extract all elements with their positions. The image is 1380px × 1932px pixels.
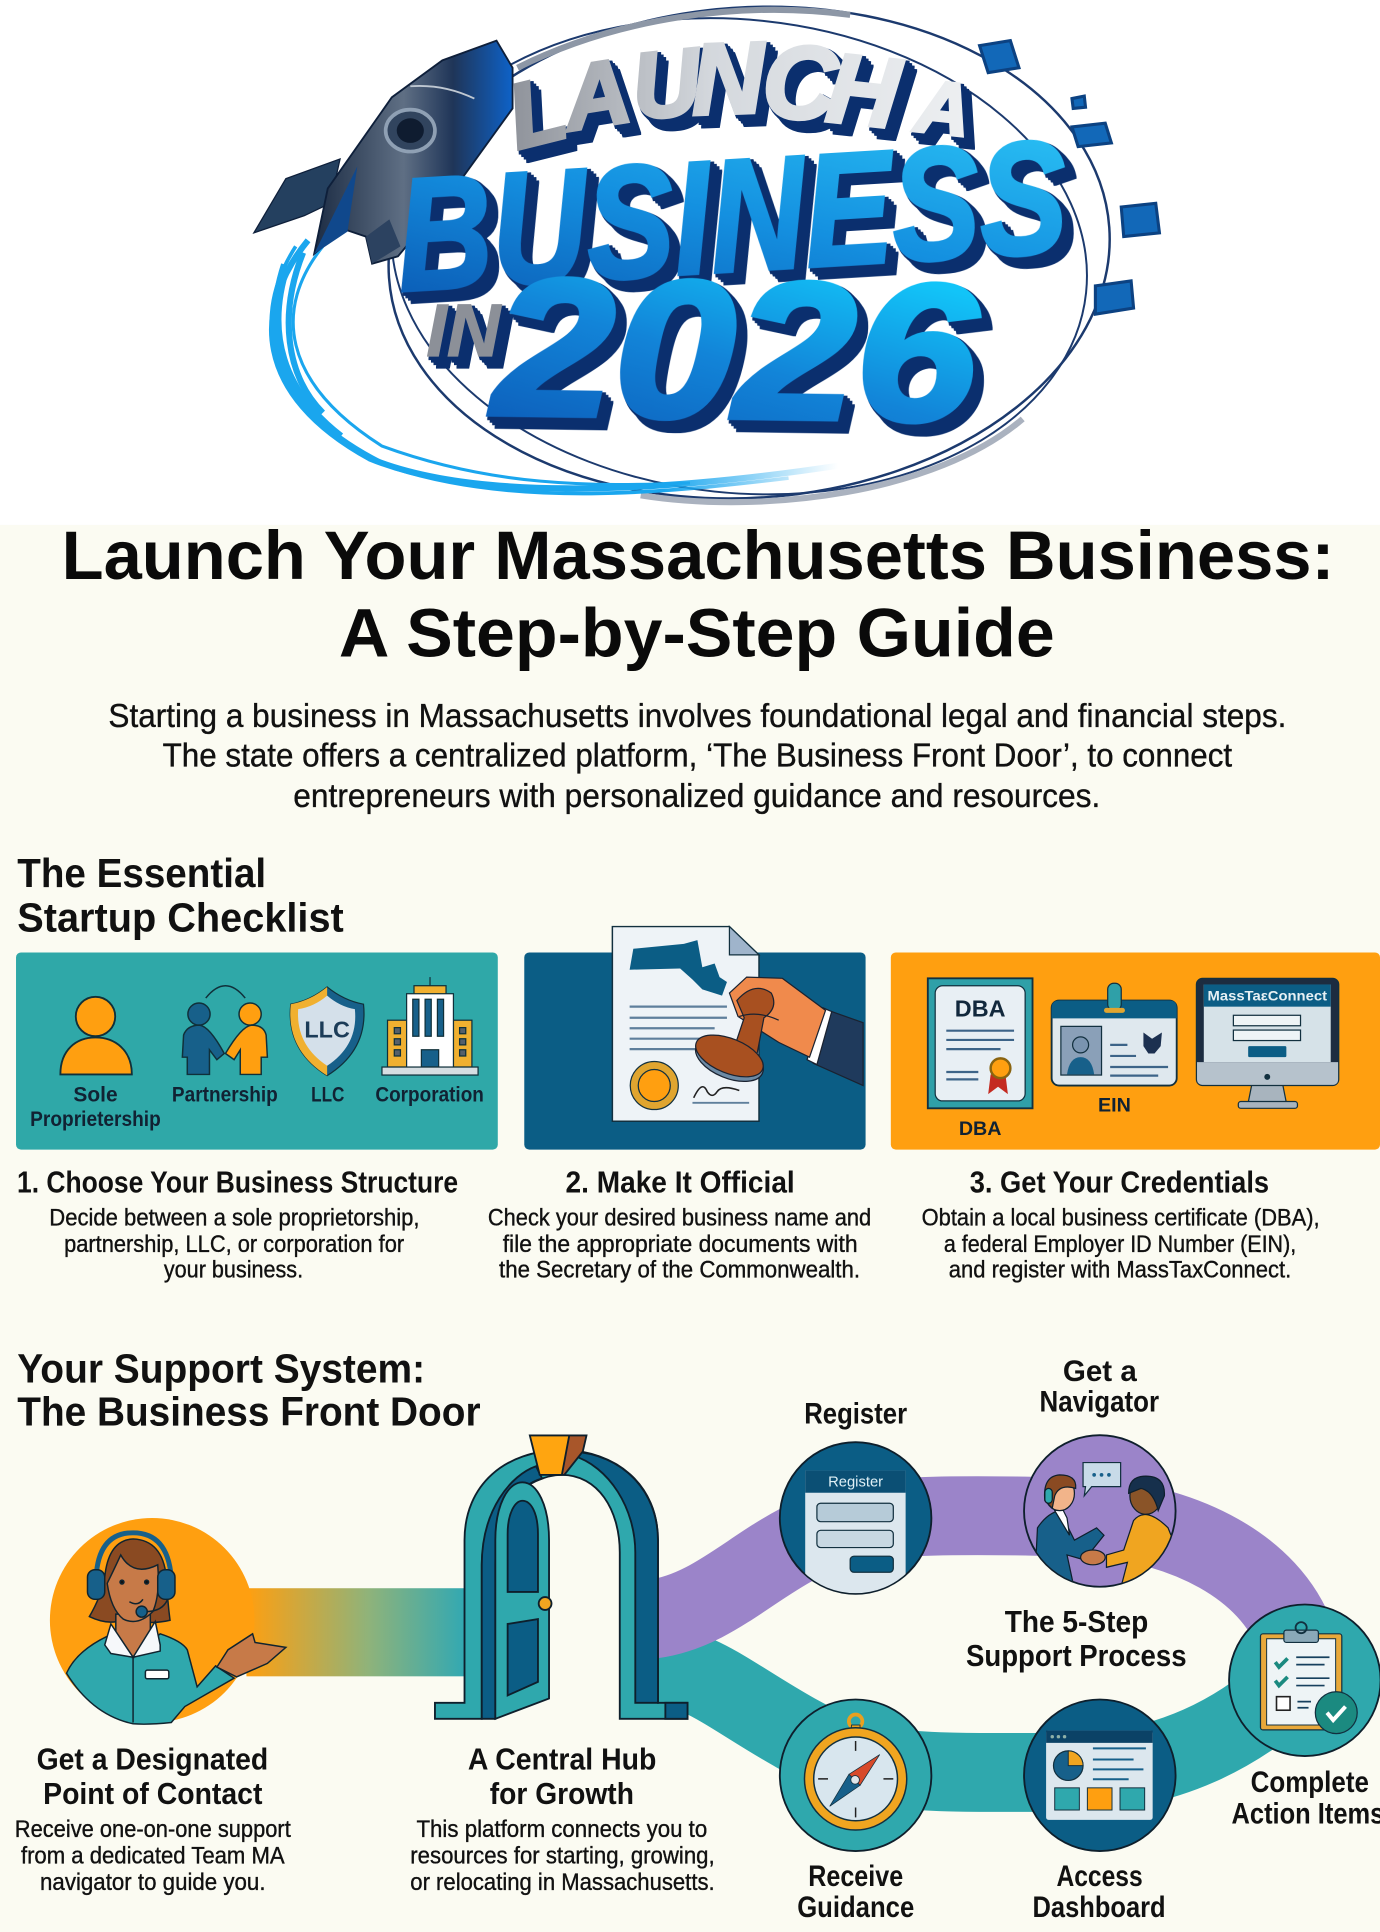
text: designated point of contact: Get a Designated	[37, 1741, 268, 1776]
step 3: get your credentials: Obtain a local business certificate (DBA),	[922, 1204, 1320, 1231]
logo word: LAUNCH A: L	[498, 56, 576, 168]
step: access dashboard: Dashboard	[1033, 1891, 1166, 1924]
text: designated point of contact: Point of Contact	[43, 1776, 262, 1811]
label: the 5-step support process: Support Process	[966, 1638, 1187, 1673]
heading: essential startup checklist	[17, 850, 344, 940]
heading: your support system: The Business Front Door	[17, 1389, 481, 1435]
step: receive guidance: Guidance	[797, 1891, 914, 1924]
step: register: Register	[804, 1398, 908, 1431]
logo word: LAUNCH A: U	[627, 28, 707, 139]
icon: EIN id card	[1052, 983, 1177, 1086]
label: the 5-step support process: The 5-Step	[1005, 1604, 1148, 1639]
logo: Launch a Business in 2026	[254, 0, 1159, 528]
icon: LLC shield: LLC	[304, 1016, 350, 1042]
step 1: choose your business structure	[17, 1165, 458, 1284]
icon: LLC shield	[290, 987, 364, 1076]
heading: essential startup checklist: The Essential	[17, 850, 266, 896]
step 1: choose your business structure: 1. Choose Your Business Structure	[17, 1165, 458, 1200]
logo rings	[368, 0, 1126, 528]
logo word: 2026: 2026	[488, 239, 980, 463]
text: central hub for growth: This platform connects you to	[416, 1816, 707, 1843]
icon: register form	[780, 1442, 931, 1594]
step 3: get your credentials	[922, 1165, 1320, 1284]
icon: corporation	[382, 977, 478, 1075]
icon: register form: Register	[828, 1475, 883, 1491]
text: central hub for growth: or relocating in Massachusetts.	[410, 1869, 715, 1896]
text: designated point of contact: navigator to guide you.	[40, 1869, 266, 1896]
step 2: make it official: the Secretary of the Commonwealth.	[499, 1257, 860, 1284]
icon: document	[612, 927, 759, 1121]
logo word: IN: IN	[426, 289, 502, 372]
text: designated point of contact: from a dedicated Team MA	[21, 1843, 285, 1870]
heading: essential startup checklist: Startup Checklist	[17, 894, 344, 940]
logo white backdrop	[0, 0, 1380, 525]
step: access dashboard: Access	[1056, 1860, 1143, 1893]
label: sole proprietorship: Proprietership	[30, 1108, 161, 1131]
rocket	[254, 41, 513, 264]
text: central hub for growth: resources for starting, growing,	[410, 1843, 715, 1870]
title: A Step-by-Step Guide	[339, 595, 1055, 672]
panel: business structures	[16, 952, 498, 1150]
icon: sole proprietor	[60, 997, 132, 1074]
text: central hub for growth: A Central Hub	[468, 1741, 656, 1776]
title: Launch Your Massachusetts Business:	[62, 517, 1334, 594]
step 2: make it official: Check your desired business name and	[488, 1204, 871, 1231]
logo word: LAUNCH A: H	[822, 32, 906, 149]
icon: dashboard window	[1024, 1699, 1176, 1851]
logo word: BUSINESS: BUSINESS	[392, 106, 1072, 325]
label: the 5-step support process	[966, 1604, 1187, 1673]
logo word: LAUNCH A: A	[911, 64, 974, 152]
panel: make it official	[524, 927, 866, 1150]
logo cubes	[980, 41, 1159, 314]
icon: checklist clipboard	[1229, 1604, 1380, 1756]
step: receive guidance: Receive	[808, 1860, 903, 1893]
label: corporation: Corporation	[375, 1084, 484, 1107]
step 1: choose your business structure: Decide between a sole proprietorship,	[49, 1204, 420, 1231]
label: DBA: DBA	[959, 1118, 1002, 1140]
intro paragraph: entrepreneurs with personalized guidance and resources.	[293, 778, 1100, 815]
step: get a navigator: Get a	[1063, 1355, 1137, 1388]
step: complete action items	[1229, 1604, 1380, 1831]
text: designated point of contact: Receive one-on-one support	[15, 1816, 291, 1843]
heading: your support system	[17, 1345, 481, 1435]
step 3: get your credentials: a federal Employer ID Number (EIN),	[944, 1231, 1296, 1258]
step 2: make it official	[488, 1165, 871, 1284]
label: EIN: EIN	[1098, 1094, 1131, 1116]
text: designated point of contact	[15, 1741, 291, 1896]
step: receive guidance	[780, 1699, 931, 1924]
step: register	[780, 1398, 931, 1594]
teal process path	[653, 1666, 1288, 1773]
keystone	[557, 1435, 586, 1475]
icon: MassTaxConnect monitor	[1196, 978, 1339, 1108]
rocket trail	[271, 240, 838, 494]
step 1: choose your business structure: your business.	[164, 1257, 303, 1284]
label: partnership: Partnership	[172, 1084, 278, 1107]
label: sole proprietorship: Sole	[73, 1084, 118, 1107]
step: get a navigator: Navigator	[1040, 1385, 1160, 1418]
door	[495, 1482, 549, 1719]
text: central hub for growth: for Growth	[490, 1776, 634, 1811]
text: central hub for growth	[410, 1741, 715, 1896]
icon: navigator handshake	[1024, 1435, 1176, 1596]
purple process path	[653, 1516, 1296, 1639]
point of contact illustration	[50, 1518, 286, 1724]
heading: your support system: Your Support System:	[17, 1345, 425, 1391]
icon: DBA certificate	[928, 978, 1033, 1108]
step 3: get your credentials: and register with MassTaxConnect.	[949, 1257, 1291, 1284]
intro paragraph: The state offers a centralized platform, ‘The Business Front Door’, to connect	[163, 737, 1232, 774]
icon: hand with stamp	[689, 977, 863, 1090]
icon: partnership	[182, 986, 267, 1074]
step 3: get your credentials: 3. Get Your Credentials	[970, 1165, 1269, 1200]
gradient connector band	[246, 1588, 468, 1676]
label: sole proprietorship	[30, 1084, 161, 1131]
step 2: make it official: file the appropriate documents with	[503, 1231, 858, 1258]
step 2: make it official: 2. Make It Official	[566, 1165, 795, 1200]
logo word: LAUNCH A: N	[689, 22, 768, 137]
icon: DBA certificate: DBA	[955, 996, 1006, 1022]
arch	[435, 1450, 688, 1719]
logo word: LAUNCH A: A	[554, 39, 637, 151]
title	[62, 517, 1334, 672]
front door arch illustration	[435, 1435, 688, 1719]
intro paragraph: Starting a business in Massachusetts involves foundational legal and financial steps.	[108, 698, 1286, 735]
step: get a navigator	[1024, 1355, 1176, 1596]
step 1: choose your business structure: partnership, LLC, or corporation for	[64, 1231, 404, 1258]
icon: compass	[780, 1699, 931, 1851]
icon: MassTaxConnect monitor: MassTaεConnect	[1208, 988, 1328, 1003]
panel: credentials	[891, 952, 1380, 1150]
step: access dashboard	[1024, 1699, 1176, 1924]
intro paragraph	[108, 698, 1286, 815]
woman with headset	[67, 1533, 286, 1724]
label: LLC: LLC	[311, 1084, 344, 1107]
logo word: LAUNCH A: C	[761, 23, 841, 142]
